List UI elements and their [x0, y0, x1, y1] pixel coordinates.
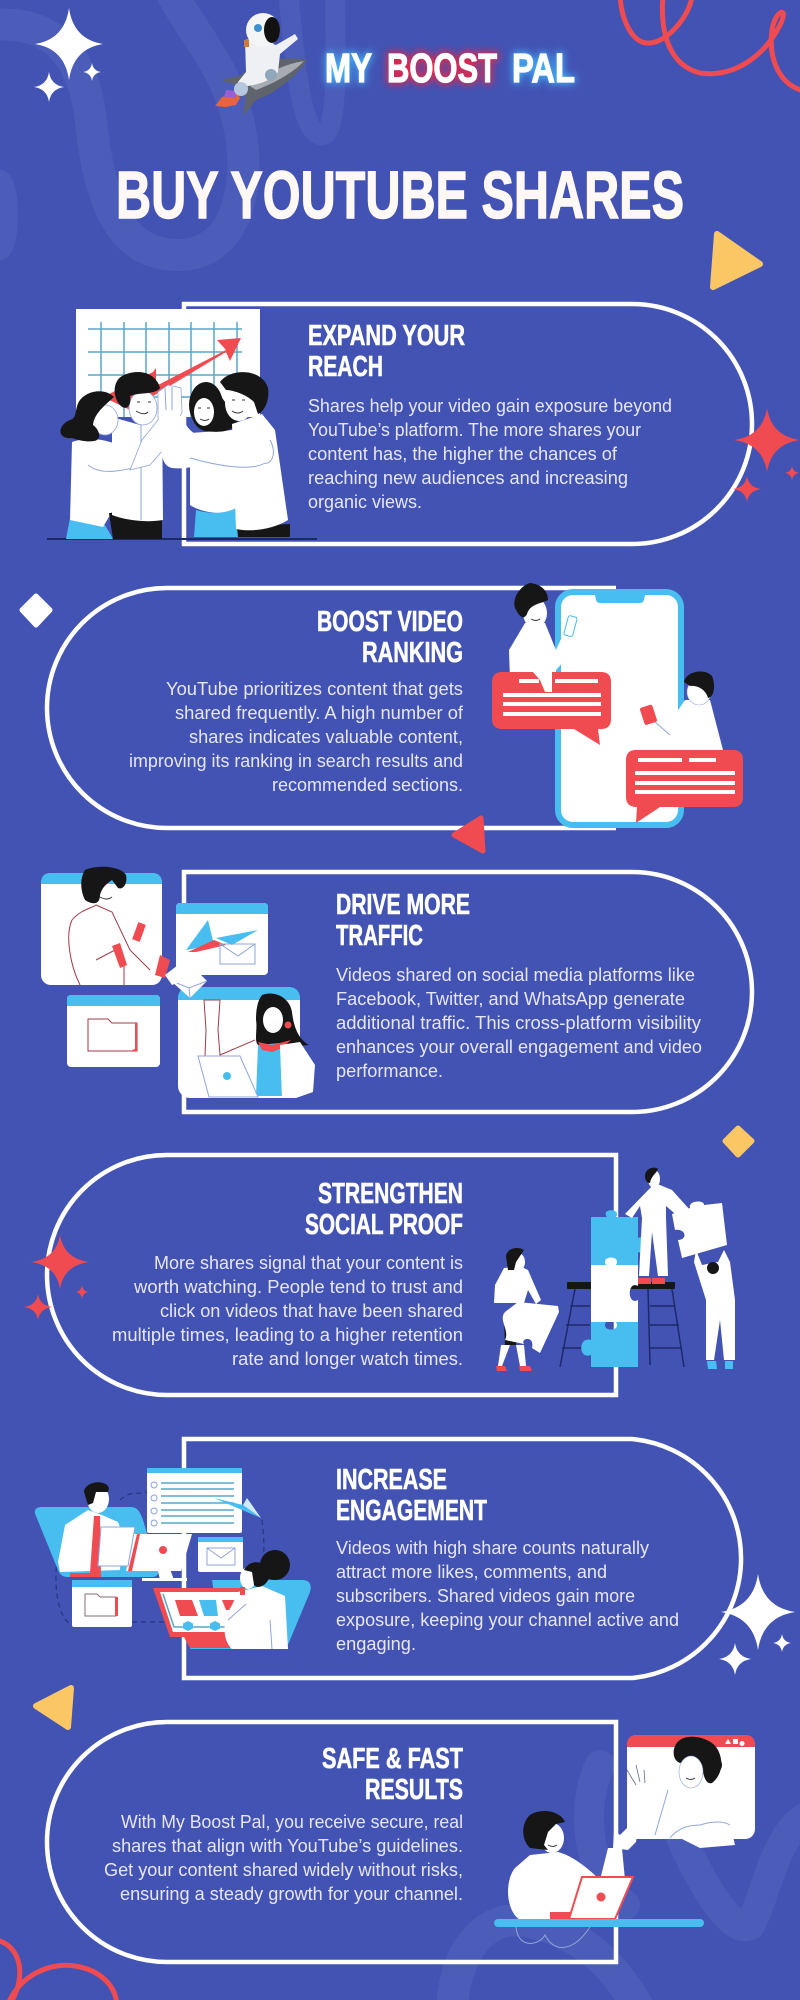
logo wordmark: PAL — [512, 45, 575, 91]
body text: increase engagement: engaging. — [336, 1634, 416, 1654]
body text: safe and fast results: ensuring a steady growth for your channel. — [120, 1884, 463, 1904]
logo wordmark: MY — [325, 45, 372, 91]
panel 3: drive more traffic — [41, 867, 752, 1112]
heading: increase engagement: INCREASE — [336, 1464, 447, 1496]
panel 4: strengthen social proof — [24, 1155, 735, 1395]
body text: boost video ranking: YouTube prioritizes content that gets — [166, 679, 463, 699]
body text: drive more traffic: enhances your overall engagement and video — [336, 1037, 702, 1057]
heading: expand your reach — [308, 320, 465, 383]
body text: boost video ranking: improving its ranking in search results and — [129, 751, 463, 771]
decoration: white sparkles top left — [34, 8, 103, 102]
body text: safe and fast results — [104, 1812, 463, 1904]
body text: increase engagement — [336, 1538, 679, 1654]
decoration: white diamond — [22, 596, 50, 625]
decoration: red triangle — [454, 818, 483, 851]
panel 5: increase engagement — [35, 1439, 741, 1678]
heading: increase engagement: ENGAGEMENT — [336, 1495, 487, 1527]
heading: boost video ranking: BOOST VIDEO — [317, 606, 463, 638]
heading: strengthen social proof — [305, 1178, 463, 1241]
body text: drive more traffic — [336, 965, 702, 1081]
decoration: yellow diamond — [725, 1128, 752, 1155]
heading: increase engagement — [336, 1464, 487, 1527]
body text: expand your reach: Shares help your video gain exposure beyond — [308, 396, 672, 416]
body text: drive more traffic: Videos shared on social media platforms like — [336, 965, 695, 985]
body text: safe and fast results: shares that align with YouTube’s guidelines. — [112, 1836, 463, 1856]
logo: astronaut on rocket — [215, 13, 307, 116]
heading: drive more traffic: DRIVE MORE — [336, 889, 470, 921]
body text: safe and fast results: Get your content shared widely without risks, — [104, 1860, 463, 1880]
logo wordmark — [325, 45, 575, 91]
logo wordmark: PAL — [512, 45, 575, 91]
heading: boost video ranking: RANKING — [362, 637, 463, 669]
body text: increase engagement: attract more likes, comments, and — [336, 1562, 607, 1582]
body text: boost video ranking: shares indicates valuable content, — [189, 727, 463, 747]
body text: increase engagement: Videos with high share counts naturally — [336, 1538, 649, 1558]
heading: drive more traffic: TRAFFIC — [336, 920, 423, 952]
decoration: yellow triangle bottom left — [36, 1688, 71, 1727]
heading: drive more traffic — [336, 889, 470, 952]
heading: boost video ranking — [317, 606, 463, 669]
decoration: yellow triangle top right — [713, 234, 760, 287]
decoration: red sparkles right — [733, 408, 800, 502]
body text: strengthen social proof: More shares signal that your content is — [154, 1253, 463, 1273]
body text: expand your reach: reaching new audiences and increasing — [308, 468, 628, 488]
illustration: team collaborating with screens — [35, 1468, 311, 1649]
decoration: red scribble top right — [620, 0, 800, 91]
illustration: team high five with growth chart — [47, 309, 317, 539]
heading: strengthen social proof: STRENGTHEN — [318, 1178, 463, 1210]
body text: increase engagement: subscribers. Shared videos gain more — [336, 1586, 635, 1606]
heading: strengthen social proof: SOCIAL PROOF — [305, 1209, 463, 1241]
decoration: red sparkles left — [24, 1235, 89, 1320]
panel 2: boost video ranking — [22, 583, 743, 851]
body text: expand your reach: content has, the higher the chances of — [308, 444, 618, 464]
illustration: people exchanging messages in windows — [41, 867, 315, 1098]
body text: boost video ranking — [129, 679, 464, 795]
illustration: people with phone and chat bubbles — [492, 583, 743, 825]
body text: boost video ranking: recommended sections. — [272, 775, 463, 795]
body text: safe and fast results: With My Boost Pal, you receive secure, real — [121, 1812, 463, 1832]
body text: strengthen social proof: worth watching. People tend to trust and — [133, 1277, 463, 1297]
body text: strengthen social proof: click on videos that have been shared — [160, 1301, 463, 1321]
decoration: white sparkles right — [719, 1574, 795, 1675]
body text: drive more traffic: Facebook, Twitter, and WhatsApp generate — [336, 989, 685, 1009]
body text: boost video ranking: shared frequently. A high number of — [175, 703, 464, 723]
heading: safe and fast results — [322, 1743, 463, 1806]
body text: expand your reach — [308, 396, 672, 512]
body text: increase engagement: exposure, keeping your channel active and — [336, 1610, 679, 1630]
heading: expand your reach: REACH — [308, 351, 383, 383]
illustration: team assembling puzzle on ladder — [494, 1168, 735, 1371]
heading: safe and fast results: SAFE & FAST — [322, 1743, 463, 1775]
logo wordmark: MY — [325, 45, 372, 91]
body text: strengthen social proof: rate and longer watch times. — [232, 1349, 463, 1369]
body text: strengthen social proof — [112, 1253, 463, 1369]
body text: expand your reach: organic views. — [308, 492, 422, 512]
body text: drive more traffic: additional traffic. This cross-platform visibility — [336, 1013, 701, 1033]
panel 1: expand your reach — [47, 304, 752, 544]
logo wordmark: BOOST — [387, 45, 497, 91]
logo wordmark: BOOST — [387, 45, 497, 91]
body text: drive more traffic: performance. — [336, 1061, 443, 1081]
heading: safe and fast results: RESULTS — [365, 1774, 463, 1806]
decoration: red scribble bottom left — [0, 1940, 117, 2000]
heading: expand your reach: EXPAND YOUR — [308, 320, 465, 352]
body text: strengthen social proof: multiple times, leading to a higher retention — [112, 1325, 463, 1345]
illustration: video call between two people — [494, 1735, 755, 1947]
body text: expand your reach: YouTube’s platform. The more shares your — [308, 420, 641, 440]
panel 6: safe and fast results — [47, 1722, 755, 1962]
